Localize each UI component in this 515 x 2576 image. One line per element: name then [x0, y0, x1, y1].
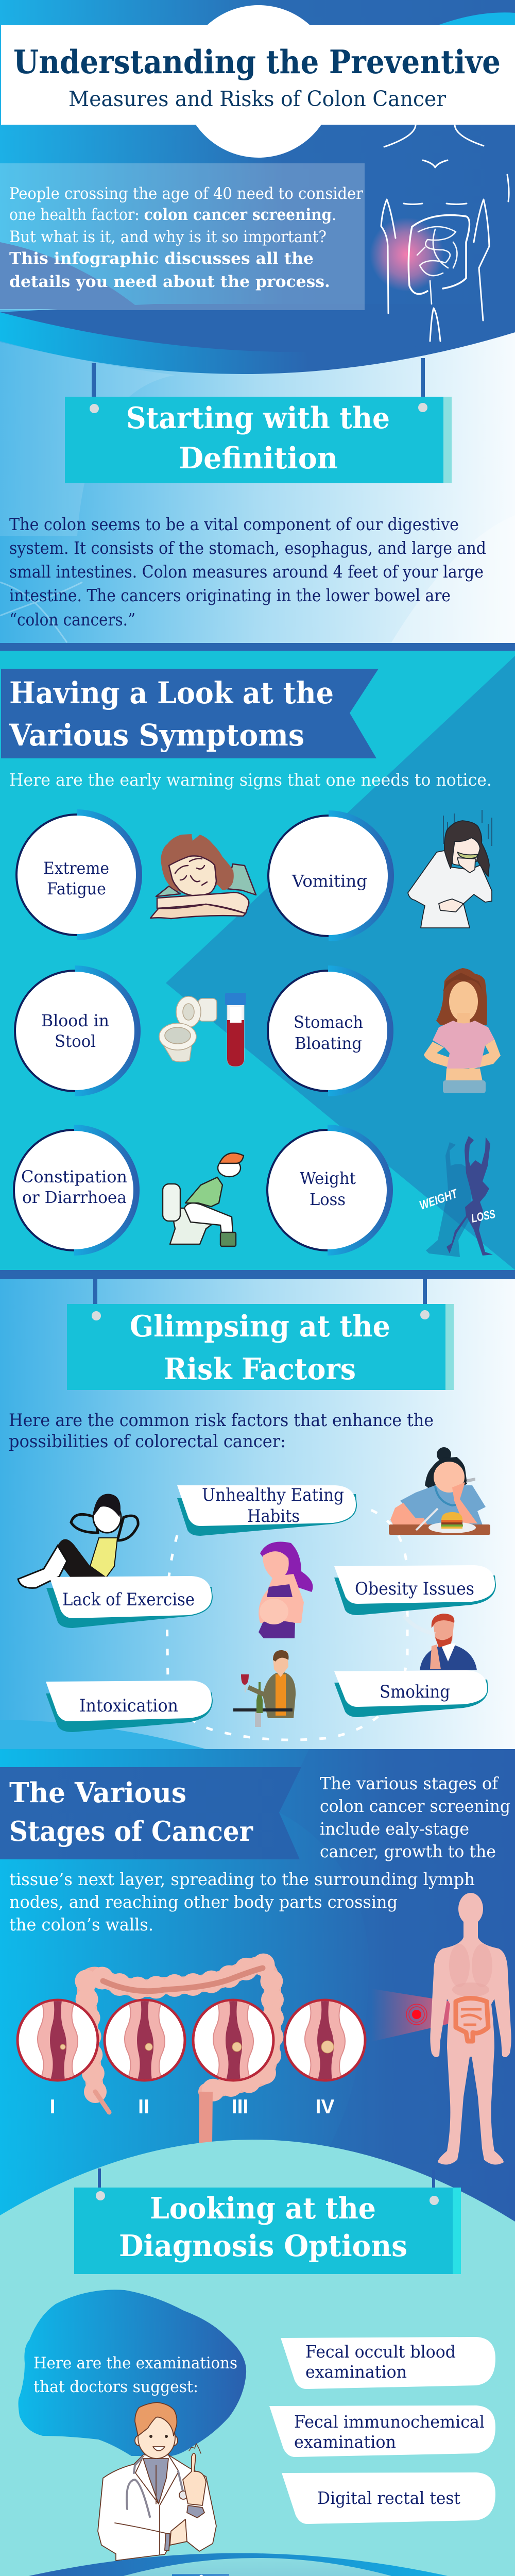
- label: unhealthy eating habits: Habits: [247, 1506, 300, 1527]
- speech blob: [19, 2290, 246, 2456]
- illustration: human body with highlighted colon: [371, 1893, 511, 2164]
- symptom: stomach bloating: Stomach: [294, 1012, 363, 1032]
- symptom: vomiting: Vomiting: [291, 871, 367, 891]
- icon: torso outline with glowing intestine: [370, 125, 509, 341]
- label: smoking: [334, 1670, 488, 1717]
- symptoms heading ribbon: [1, 669, 379, 758]
- symptom: stomach bloating: [268, 965, 393, 1096]
- risk factors intro text: Here are the common risk factors that enhance the: [9, 1410, 434, 1431]
- risk factors hanging sign: [67, 1279, 454, 1390]
- option: fecal occult blood examination: examination: [305, 2362, 407, 2382]
- section background: header and hero: [0, 0, 515, 645]
- label: lack of exercise: [46, 1576, 213, 1628]
- symptom: extreme fatigue: [16, 809, 142, 940]
- symptom: extreme fatigue: Fatigue: [47, 879, 106, 899]
- footer background: [0, 2553, 515, 2576]
- option: fecal immunochemical examination: Fecal immunochemical: [294, 2412, 485, 2432]
- diagnosis heading: Diagnosis Options: [119, 2229, 407, 2263]
- symptom: blood in stool: [15, 965, 141, 1096]
- option: fecal occult blood examination: [281, 2337, 495, 2389]
- blob text: that doctors suggest:: [33, 2378, 198, 2396]
- icon: man on toilet: [163, 1153, 244, 1246]
- symptom: constipation or diarrhoea: or Diarrhoea: [22, 1188, 127, 1207]
- icon: weight loss silhouettes: [418, 1136, 496, 1257]
- icon: tired woman resting on arms: [150, 834, 256, 919]
- stage II: II: [138, 2096, 149, 2118]
- symptoms intro text: Here are the early warning signs that one needs to notice.: [9, 770, 492, 790]
- risk factors heading: Risk Factors: [164, 1352, 356, 1386]
- symptom: extreme fatigue: Extreme: [43, 858, 109, 878]
- icon: woman vomiting: [408, 810, 492, 928]
- intro text: But what is it, and why is it so important?: [9, 228, 327, 246]
- symptoms heading: Having a Look at the: [9, 675, 334, 710]
- option: fecal immunochemical examination: examination: [294, 2432, 396, 2452]
- diagnosis hanging sign: [74, 2168, 461, 2274]
- illustration: large colon: [85, 1964, 272, 2145]
- stages heading: Stages of Cancer: [9, 1816, 253, 1848]
- label: smoking: Smoking: [380, 1682, 450, 1702]
- stages heading: The Various: [9, 1777, 186, 1809]
- intro panel: [0, 163, 365, 310]
- stage II: [105, 2000, 185, 2118]
- definition body text: The colon seems to be a vital component of our digestive: [9, 514, 459, 534]
- symptom: constipation or diarrhoea: Constipation: [21, 1167, 127, 1187]
- subtitle: Measures and Risks of Colon Cancer: [68, 87, 446, 111]
- diagnosis heading: Looking at the: [150, 2191, 376, 2226]
- intro text: People crossing the age of 40 need to consider: [9, 184, 363, 203]
- icon: toilet: [159, 996, 217, 1062]
- label: obesity issues: Obesity Issues: [355, 1579, 474, 1599]
- intro text: one health factor: colon cancer screening.: [9, 206, 336, 224]
- option: fecal occult blood examination: Fecal occult blood: [305, 2342, 456, 2362]
- stage III: [193, 2000, 273, 2118]
- label: intoxication: Intoxication: [79, 1696, 178, 1716]
- company logo: [172, 2574, 342, 2576]
- stages description text: tissue’s next layer, spreading to the surrounding lymph: [9, 1869, 475, 1889]
- symptom: constipation or diarrhoea: [14, 1125, 140, 1256]
- definition heading: Definition: [179, 441, 338, 476]
- icon: weight loss silhouettes: LOSS: [470, 1207, 496, 1225]
- stages description text: include ealy-stage: [320, 1819, 469, 1839]
- definition body text: [9, 514, 486, 630]
- label: unhealthy eating habits: Unhealthy Eating: [202, 1485, 344, 1505]
- stages description text: nodes, and reaching other body parts crossing: [9, 1892, 398, 1912]
- icon: blood test tube: [225, 993, 246, 1066]
- dashed connecting ring: [167, 1507, 407, 1740]
- icon: woman eating burger: [389, 1447, 490, 1535]
- symptom: stomach bloating: Bloating: [295, 1033, 362, 1053]
- risk factors intro text: [9, 1410, 434, 1452]
- icon: woman doing sit-ups: [18, 1494, 138, 1589]
- stage I: I: [50, 2096, 55, 2118]
- option: digital rectal test: [282, 2472, 495, 2524]
- symptom: blood in stool: Stool: [55, 1031, 96, 1051]
- label: unhealthy eating habits: [177, 1485, 357, 1536]
- risk factors intro text: possibilities of colorectal cancer:: [9, 1431, 286, 1452]
- blob text: [33, 2354, 237, 2396]
- stages description text: cancer, growth to the: [320, 1841, 496, 1861]
- stages heading ribbon: [0, 1767, 301, 1859]
- diagnosis heading: [119, 2191, 407, 2263]
- stages description text: The various stages of: [320, 1773, 500, 1793]
- icon: woman with bloated stomach: [424, 968, 501, 1093]
- stage III: III: [232, 2096, 248, 2118]
- stage IV: [285, 2000, 365, 2118]
- symptom: blood in stool: Blood in: [41, 1011, 109, 1030]
- intro text: details you need about the process.: [9, 273, 330, 291]
- symptoms heading: [9, 675, 334, 753]
- stages description text: colon cancer screening: [320, 1796, 510, 1816]
- stages heading: [9, 1777, 253, 1848]
- icon: woman with obesity: [259, 1541, 313, 1638]
- section background: symptoms: [0, 643, 515, 1270]
- symptom: weight loss: [267, 1125, 393, 1256]
- diagnosis background dome: [0, 2140, 515, 2576]
- illustration: doctor: [98, 2402, 216, 2561]
- target marker: [406, 2004, 427, 2025]
- definition heading: Starting with the: [126, 401, 390, 435]
- blob text: Here are the examinations: [33, 2354, 237, 2372]
- section background: stages: [0, 1749, 515, 2244]
- label: obesity issues: [334, 1565, 496, 1615]
- definition body text: “colon cancers.”: [9, 609, 135, 630]
- option: digital rectal test: Digital rectal test: [317, 2488, 460, 2508]
- definition body text: intestine. The cancers originating in the lower bowel are: [9, 585, 451, 605]
- title banner: [1, 5, 515, 158]
- intro text: This infographic discusses all the: [9, 249, 314, 268]
- icon: man smoking: [404, 1614, 477, 1670]
- definition hanging sign: [65, 358, 452, 483]
- label: lack of exercise: Lack of Exercise: [62, 1589, 195, 1610]
- symptoms heading: Various Symptoms: [9, 718, 304, 753]
- icon: man drinking wine: [233, 1650, 296, 1727]
- risk factors heading: [130, 1309, 390, 1386]
- stages description text: [9, 1773, 510, 1935]
- intro text: [9, 184, 363, 291]
- stages description text: the colon’s walls.: [9, 1914, 153, 1935]
- option: fecal immunochemical examination: [269, 2405, 495, 2457]
- symptom: weight loss: Weight: [300, 1168, 356, 1188]
- section background: risk factors: [0, 1270, 515, 1749]
- stage IV: IV: [316, 2096, 334, 2118]
- symptom: vomiting: [268, 810, 394, 941]
- icon: weight loss silhouettes: WEIGHT: [418, 1187, 460, 1213]
- label: intoxication: [46, 1681, 213, 1732]
- stage I: [18, 2000, 98, 2118]
- risk factors heading: Glimpsing at the: [130, 1309, 390, 1344]
- symptom: weight loss: Loss: [310, 1190, 346, 1209]
- definition heading: [126, 401, 390, 476]
